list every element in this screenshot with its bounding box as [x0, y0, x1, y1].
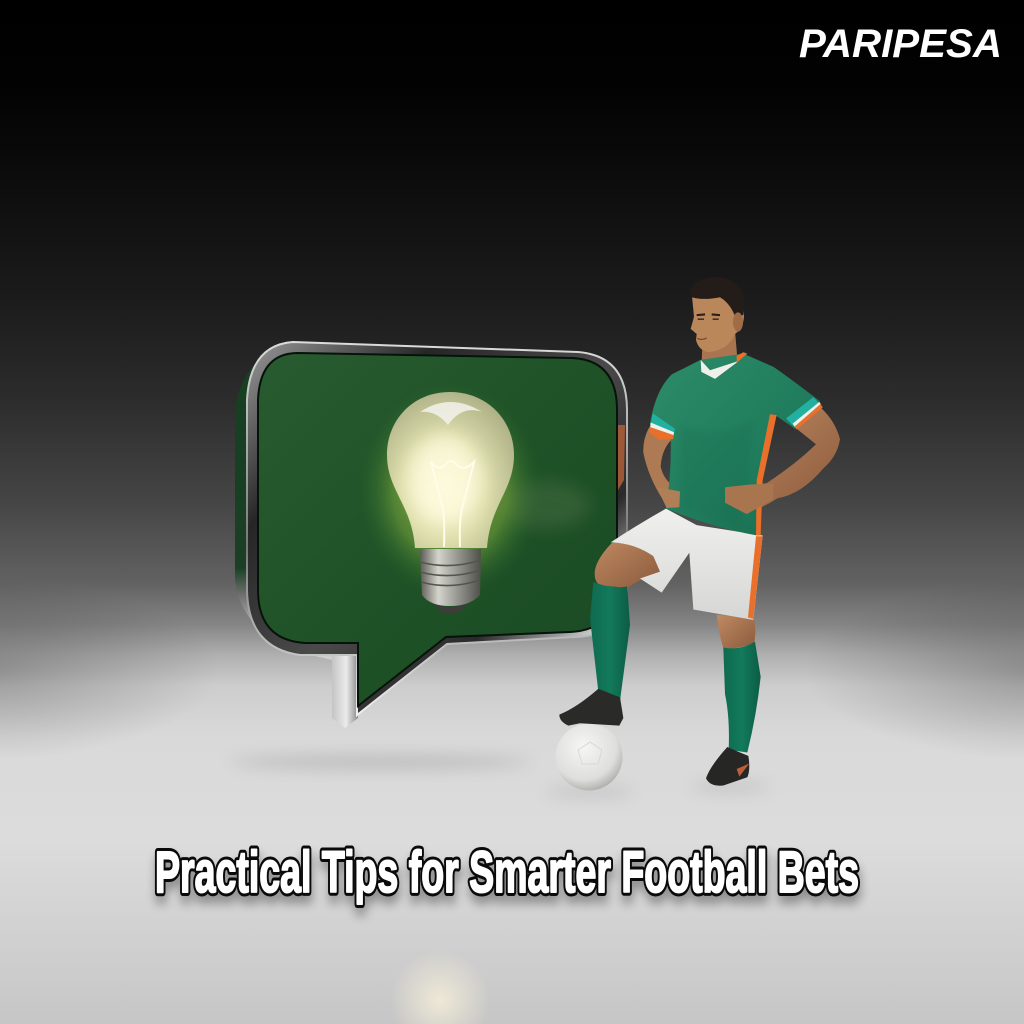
footballer [559, 277, 840, 786]
base tip [434, 604, 468, 614]
screw base [420, 549, 481, 606]
shorts orange stripe [748, 536, 763, 619]
right sleeve cuff [786, 397, 823, 429]
inner glow [409, 436, 481, 524]
left arm [643, 427, 680, 508]
speech bubble with light bulb [235, 342, 627, 728]
bubble green face [258, 353, 617, 706]
head [689, 277, 745, 352]
jersey [649, 352, 823, 536]
light bulb [387, 392, 514, 614]
brand logo: PARIPESA [799, 22, 1002, 66]
floor shadows [230, 755, 770, 796]
football [556, 724, 622, 790]
bubble chrome frame [247, 342, 627, 715]
jersey shading [680, 422, 753, 529]
neck [702, 331, 737, 375]
standing boot [706, 747, 749, 786]
left sleeve cuff [650, 413, 675, 436]
face soft reflection [500, 481, 590, 529]
jersey orange side stripe [756, 414, 777, 536]
raised boot [559, 689, 623, 726]
right arm [725, 406, 840, 514]
bulb glass [387, 392, 514, 548]
standing sock [723, 642, 761, 752]
raised thigh and knee [595, 539, 662, 588]
tail side extrusion [332, 656, 358, 728]
collar [701, 353, 747, 379]
right edge reflection [618, 425, 625, 490]
glass highlight [420, 402, 482, 425]
shorts [611, 509, 763, 620]
filament [431, 461, 474, 547]
hands on hips [657, 484, 773, 514]
standing leg skin [717, 615, 755, 651]
raised sock [590, 582, 630, 701]
bubble side extrusion [235, 352, 358, 660]
collar orange [737, 352, 747, 363]
bulb glow [358, 382, 542, 598]
